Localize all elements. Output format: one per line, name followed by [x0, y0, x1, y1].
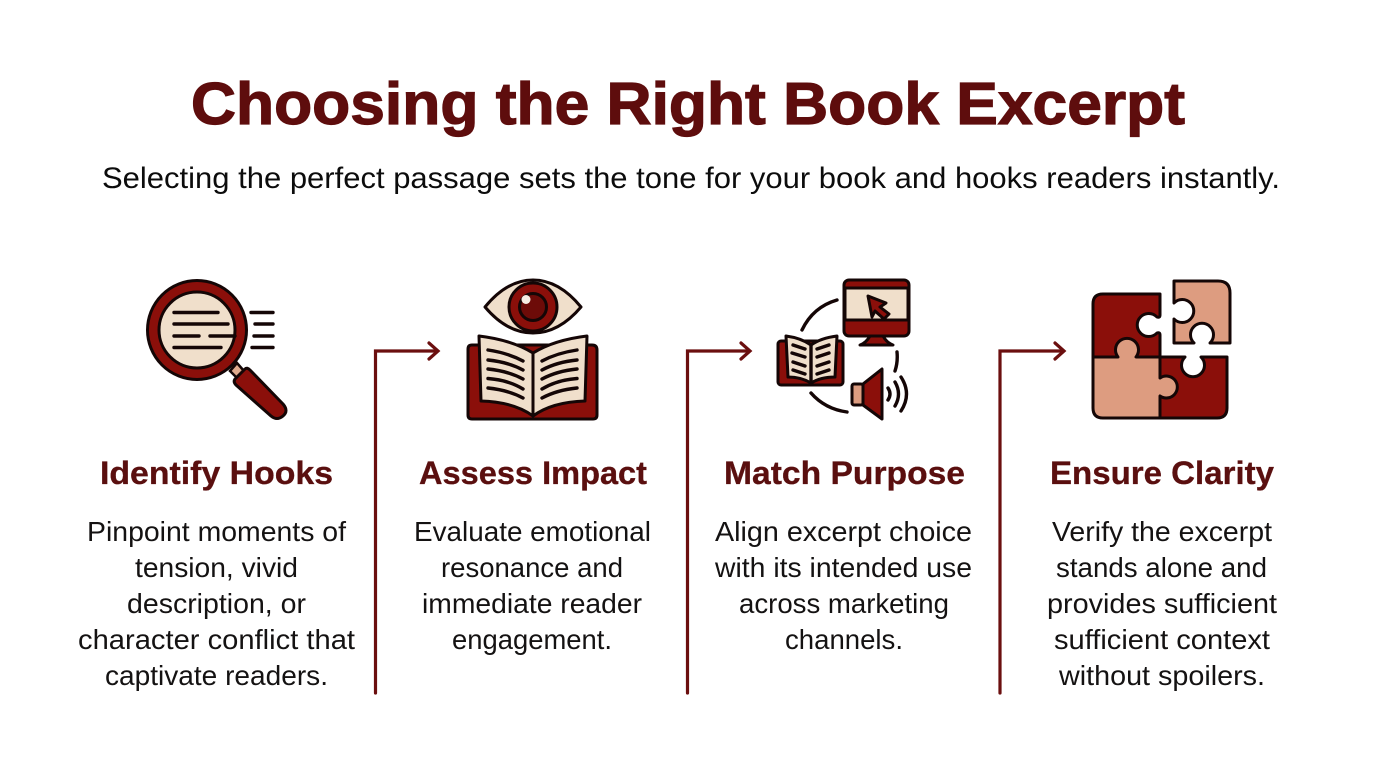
text block: assess impact: resonance and: [441, 552, 623, 583]
text block: assess impact: engagement.: [452, 624, 612, 655]
arrow: hooks to impact: [376, 343, 438, 693]
icon: eye over open book: [468, 280, 597, 419]
title: Choosing the Right Book Excerpt: [191, 71, 1185, 137]
text block: ensure clarity: provides sufficient: [1047, 588, 1277, 619]
text block: identify hooks: character conflict that: [78, 624, 355, 655]
text block: match purpose: across marketing: [739, 588, 949, 619]
text block: match purpose: [714, 516, 972, 655]
icon: puzzle pieces: [1093, 281, 1230, 418]
text block: ensure clarity: [1047, 516, 1277, 691]
icon: magnifying glass over text: [148, 280, 286, 418]
arrow: impact to purpose: [688, 343, 750, 693]
arrow: purpose to clarity: [1000, 343, 1064, 693]
text block: identify hooks: [78, 516, 355, 691]
panel: match purpose: [714, 280, 972, 655]
text block: match purpose: Align excerpt choice: [715, 516, 972, 547]
panel: ensure clarity: [1047, 281, 1277, 691]
text block: identify hooks: description, or: [127, 588, 306, 619]
panel: identify hooks: [78, 280, 355, 691]
subtitle: Selecting the perfect passage sets the tone for your book and hooks readers instantly.: [102, 162, 1280, 195]
text block: assess impact: immediate reader: [422, 588, 642, 619]
text block: ensure clarity: sufficient context: [1054, 624, 1270, 655]
panel: assess impact: [414, 280, 651, 655]
text block: ensure clarity: without spoilers.: [1058, 660, 1265, 691]
text block: identify hooks: tension, vivid: [135, 552, 298, 583]
heading: ensure clarity: Ensure Clarity: [1050, 455, 1274, 491]
text block: ensure clarity: Verify the excerpt: [1052, 516, 1272, 547]
heading: match purpose: Match Purpose: [724, 455, 965, 491]
text block: assess impact: Evaluate emotional: [414, 516, 651, 547]
text block: identify hooks: Pinpoint moments of: [87, 516, 346, 547]
text block: ensure clarity: stands alone and: [1056, 552, 1267, 583]
icon: book, monitor and speaker cycle: [778, 280, 909, 419]
text block: match purpose: channels.: [785, 624, 903, 655]
text block: match purpose: with its intended use: [714, 552, 972, 583]
heading: identify hooks: Identify Hooks: [100, 455, 333, 491]
text block: assess impact: [414, 516, 651, 655]
text block: identify hooks: captivate readers.: [105, 660, 328, 691]
heading: assess impact: Assess Impact: [419, 455, 647, 491]
